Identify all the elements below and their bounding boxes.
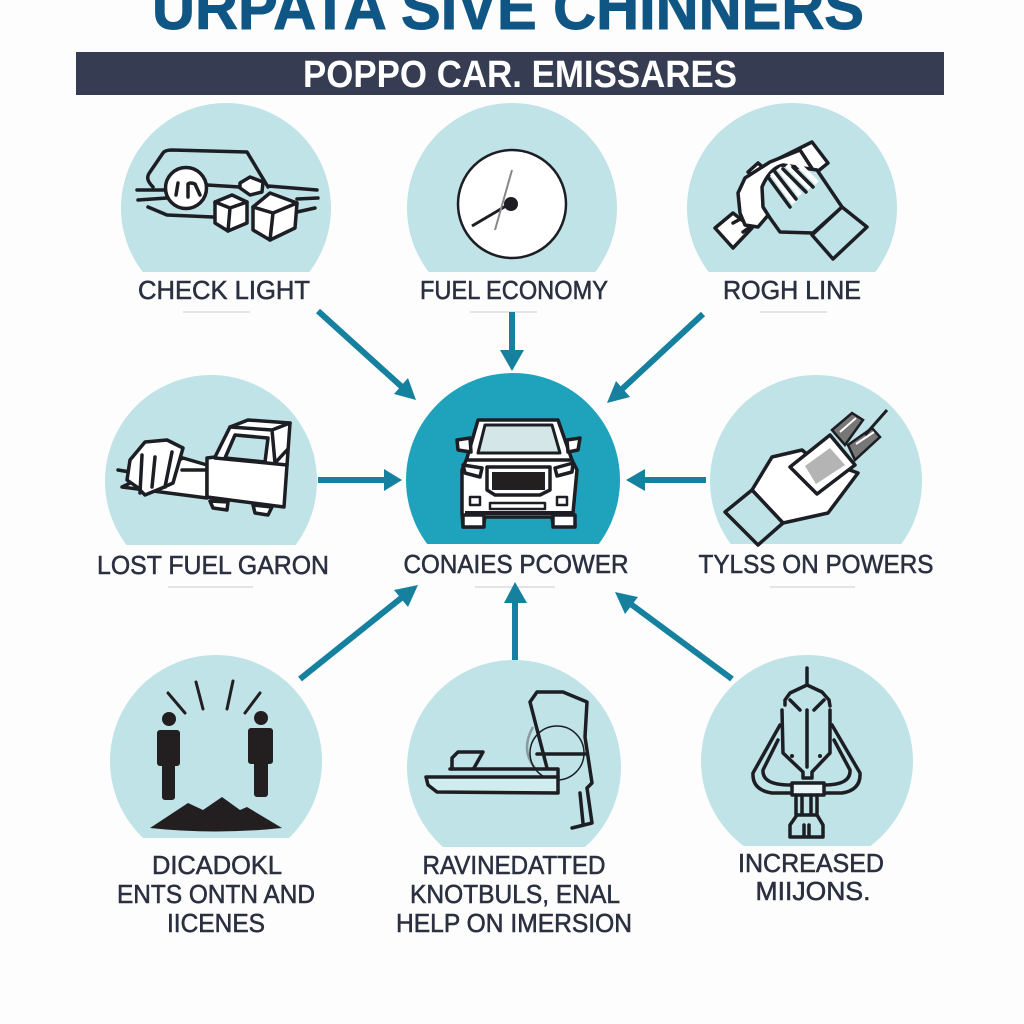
panel: increased (696, 655, 918, 906)
icon: mechanical part (753, 668, 860, 837)
subtitle banner (76, 52, 944, 96)
panel: rough line (682, 103, 902, 316)
text: ravinedatted: RAVINEDATTED (422, 850, 606, 880)
text: dicadokl: DICADOKL (152, 850, 282, 880)
text: dicadokl: ENTS ONTN AND (117, 879, 315, 909)
icon: engine and boxes (137, 150, 318, 240)
panel: tylss on powers (692, 375, 940, 588)
text: ravinedatted (396, 850, 632, 938)
text: increased: INCREASED (738, 848, 884, 878)
icon: hand holding device (725, 410, 887, 545)
subtitle banner: POPPO CAR. EMISSARES (303, 54, 737, 96)
arrow: top left (318, 311, 416, 400)
arrow: middle left (318, 469, 402, 491)
text: increased: MIIJONS. (756, 876, 870, 906)
icon: people and mountain (150, 681, 282, 832)
text: dicadokl: IICENES (167, 908, 265, 938)
text: increased (738, 848, 884, 906)
text: ravinedatted: KNOTBULS, ENAL (410, 879, 620, 909)
label: rough line: ROGH LINE (723, 275, 861, 305)
arrow: bottom left (300, 585, 418, 679)
text: dicadokl (117, 850, 315, 938)
label: lost fuel: LOST FUEL GARON (97, 550, 329, 580)
panel: ravinedatted (396, 660, 632, 938)
arrow: top right (607, 314, 703, 403)
label: central: CONAIES PCOWER (404, 549, 628, 579)
text: ravinedatted: HELP ON IMERSION (396, 908, 632, 938)
arrow: middle right (626, 469, 706, 491)
icon: hand with part (715, 142, 867, 259)
panel: lost fuel (92, 375, 334, 588)
panel: fuel economy (402, 103, 622, 316)
panel: check light (116, 103, 336, 316)
arrow: bottom center (504, 582, 527, 660)
icon: hand and truck (118, 420, 290, 515)
arrow: bottom right (615, 592, 732, 679)
panel: central car (396, 373, 634, 588)
icon: boat and tower (426, 692, 592, 828)
arrow: top center (500, 312, 524, 371)
label: tylss: TYLSS ON POWERS (698, 549, 934, 579)
icon: gauge (458, 150, 566, 258)
label: check light: CHECK LIGHT (138, 275, 310, 305)
label: fuel economy: FUEL ECONOMY (420, 275, 608, 305)
panel: dicadokl (106, 655, 326, 938)
icon: car (457, 420, 580, 527)
